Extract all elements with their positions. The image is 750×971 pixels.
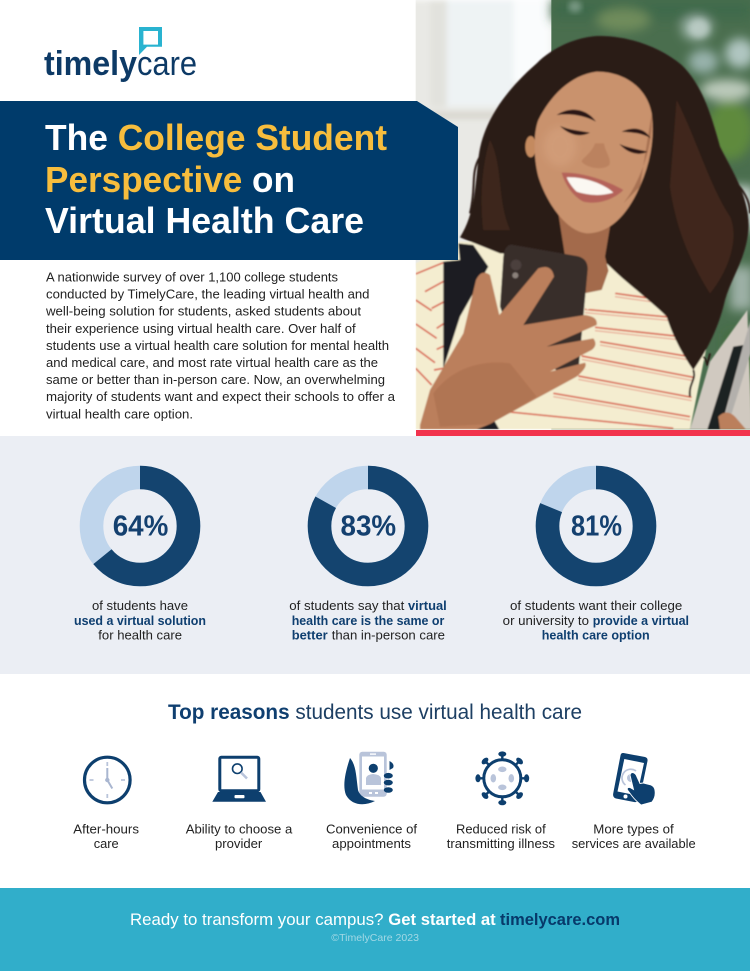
reason: after-hours care [73, 757, 139, 851]
logo speech bubble [139, 27, 162, 55]
label: appointments [332, 836, 411, 851]
heading: top reasons: Top reasons students use virtual health care [168, 701, 582, 724]
caption: 64%: used a virtual solution [74, 613, 206, 628]
icon: finger tapping phone [613, 753, 655, 805]
intro paragraph: majority of students want and expect their schools to offer a [46, 389, 396, 404]
mouth [562, 173, 623, 203]
label: Ability to choose a [186, 822, 293, 836]
footer band [0, 888, 750, 971]
hair [460, 36, 749, 370]
reason: more types of services [572, 753, 696, 851]
icon: virus [475, 751, 529, 805]
ear [525, 136, 536, 157]
caption: 83%: better [292, 628, 328, 642]
photo: student smiling at phone [410, 0, 750, 430]
donut chart: 81% [548, 478, 644, 574]
title: Virtual Health Care [45, 200, 364, 241]
label: transmitting illness [447, 836, 555, 851]
photo background: foliage [551, 0, 750, 430]
icon: hand holding phone with doctor [344, 752, 394, 804]
face [535, 72, 653, 233]
title panel [0, 101, 458, 260]
nose [582, 143, 610, 168]
donut chart: 64% [92, 478, 188, 574]
intro paragraph: their experience using virtual health care. Over half of [46, 321, 356, 336]
value: 81%: 81% [571, 511, 622, 543]
title: Perspective on [45, 159, 295, 200]
title: The College Student [45, 117, 387, 158]
label: provider [215, 836, 263, 851]
intro paragraph: well-being solution for students, asked students about [45, 304, 361, 319]
intro paragraph: A nationwide survey of over 1,100 college students [46, 270, 338, 284]
caption: 83%: health care is the same or [292, 613, 444, 628]
shirt [416, 242, 710, 429]
intro paragraph: and medical care, and most rate virtual health care as the [46, 355, 378, 370]
intro paragraph [45, 270, 396, 422]
caption: 81%: provide a virtual [593, 613, 689, 628]
icon: laptop with magnifier [212, 757, 266, 802]
label [447, 822, 555, 851]
label: More types of [593, 822, 674, 836]
intro paragraph: students use a virtual health care solution for mental health [46, 338, 389, 353]
books [690, 310, 750, 429]
caption: 81%: health care option [542, 628, 650, 642]
backpack strap [443, 243, 488, 368]
eyes [560, 126, 590, 135]
call to action: Ready to transform your campus? [130, 910, 384, 929]
caption: 83%: virtual [408, 598, 447, 613]
reason: reduced risk of transmitting illness [447, 751, 555, 851]
caption: 81%: of students want their college [510, 598, 682, 613]
intro paragraph: same or better than in-person care. Now, an overwhelming [46, 372, 385, 387]
eyebrows [557, 110, 596, 122]
reason: choose a provider [186, 757, 293, 851]
stat: 83% [289, 478, 447, 642]
caption: 81% [503, 598, 689, 642]
stat: 64% [74, 478, 206, 642]
hair strands [470, 157, 750, 397]
label: services are available [572, 836, 696, 851]
caption: 81%: or university to [503, 613, 589, 628]
icon: clock [84, 757, 130, 803]
logo wordmark: timely [44, 45, 137, 83]
panel: statistics [0, 436, 750, 674]
caption: 64% [74, 598, 206, 642]
hand [420, 267, 597, 429]
call to action: timelycare.com [500, 910, 620, 929]
label [572, 822, 696, 851]
value: 64%: 64% [113, 511, 169, 543]
caption: 83%: of students say that [289, 598, 405, 613]
reason: convenience of appointments [326, 752, 417, 851]
intro paragraph: conducted by TimelyCare, the leading virtual health and [46, 287, 370, 302]
shirt stripes [416, 263, 697, 428]
caption: 83% [289, 598, 447, 642]
label: Reduced risk of [456, 822, 546, 836]
donut chart: 83% [320, 478, 416, 574]
label: care [94, 836, 119, 851]
label: After-hours [73, 822, 139, 836]
red accent bar under photo [416, 430, 750, 436]
neck [558, 213, 610, 293]
title [45, 117, 387, 241]
caption: 64%: of students have [92, 598, 188, 613]
caption: 64%: for health care [98, 628, 182, 642]
label: Convenience of [326, 822, 417, 836]
logo wordmark: care [137, 45, 197, 83]
stat: 81% [503, 478, 689, 642]
logo: timelycare [44, 27, 197, 83]
value: 83%: 83% [340, 511, 396, 543]
caption: 83%: than in-person care [332, 628, 445, 642]
photo background: building [410, 0, 553, 267]
call to action [130, 910, 620, 929]
intro paragraph: virtual health care option. [46, 406, 193, 422]
copyright: ©TimelyCare 2023 [331, 932, 419, 944]
label [186, 822, 293, 851]
phone [500, 245, 588, 379]
label [326, 822, 417, 851]
label [73, 822, 139, 851]
call to action: Get started at [388, 910, 496, 929]
